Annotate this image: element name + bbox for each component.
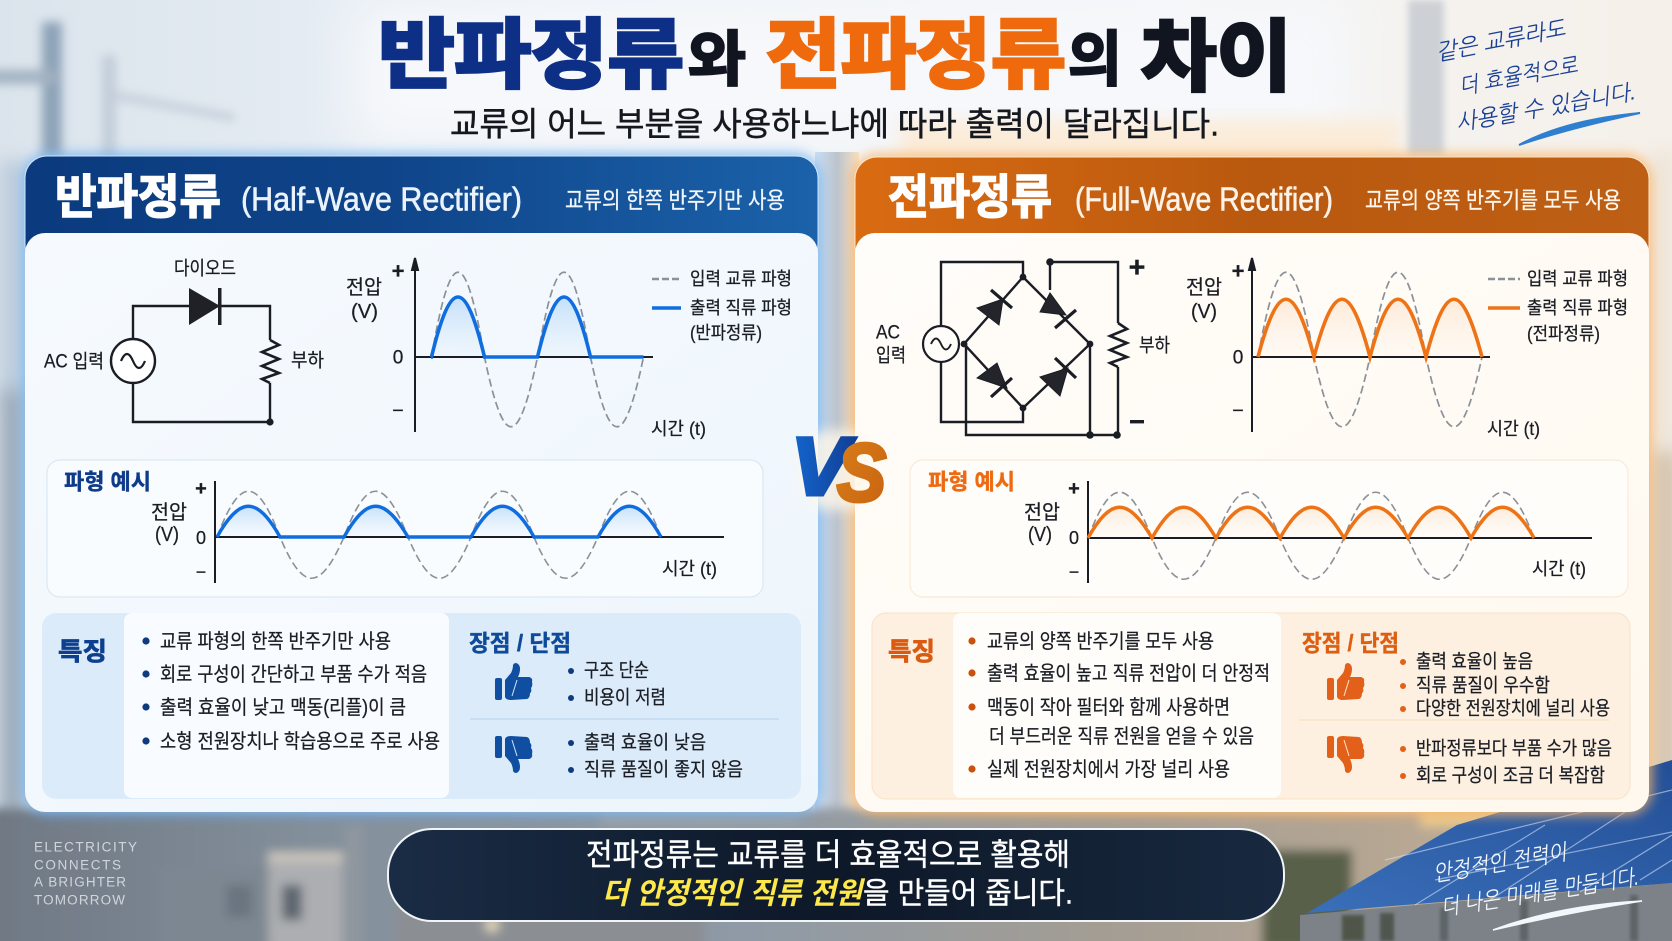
handwritten note: top right: 같은 교류라도 (1434, 15, 1568, 65)
features list: 교류 파형의 한쪽 반주기만 사용 (160, 630, 391, 653)
features list (968, 630, 1270, 781)
cons list (568, 732, 743, 780)
chart: full-wave voltage graph: − (1232, 400, 1244, 422)
handwritten note: top right (1434, 15, 1640, 145)
icon: resistor (1110, 323, 1127, 367)
icon: thumbs down (1327, 736, 1364, 773)
pros and cons block (469, 630, 779, 780)
label: load: 부하 (291, 350, 324, 372)
label: AC input: AC 입력 (44, 350, 104, 372)
tagline: electricity connects: CONNECTS (34, 858, 121, 872)
callout line 2 (602, 878, 1073, 910)
chart: full-wave voltage graph: + (1232, 258, 1244, 284)
callout: conclusion pill (388, 829, 1284, 921)
waveform example box: 0 (1069, 528, 1079, 548)
label: AC input: AC (876, 322, 900, 344)
label: AC input: 입력 (876, 344, 906, 366)
pros and cons block (1299, 630, 1612, 786)
waveform example box: − (196, 562, 206, 582)
header band (25, 156, 818, 266)
icon: AC source (111, 339, 155, 383)
chart legend: (반파정류) (690, 323, 762, 343)
panel body (25, 233, 818, 812)
circuit: half-wave diode circuit (44, 258, 324, 426)
header description: 교류의 양쪽 반주기를 모두 사용 (1365, 187, 1621, 213)
panel body (855, 233, 1649, 812)
icon: resistor (262, 340, 279, 383)
chart: half-wave voltage graph: 시간 (t) (651, 419, 706, 439)
panel: full-wave rectifier (852, 154, 1652, 815)
pros list: 출력 효율이 높음 (1416, 650, 1533, 672)
lower landscape (0, 805, 1672, 941)
waveform example box (47, 460, 763, 597)
waveform example box: 시간 (t) (1532, 559, 1586, 579)
cons list: 회로 구성이 조금 더 복잡함 (1416, 764, 1605, 786)
pros list: 구조 단순 (584, 660, 649, 682)
pros list: 직류 품질이 우수함 (1416, 674, 1550, 696)
features list: 소형 전원장치나 학습용으로 주로 사용 (160, 730, 440, 753)
chart legend (652, 269, 792, 343)
callout line 1: 전파정류는 교류를 더 효율적으로 활용해 (586, 838, 1070, 872)
waveform title: 파형 예시 (928, 470, 1015, 494)
features heading: 특징 (888, 638, 935, 666)
title: 차이 (1141, 13, 1292, 101)
chart: half-wave voltage graph (346, 258, 792, 439)
chart: full-wave voltage graph: (V) (1191, 301, 1217, 323)
circuit: full-wave bridge rectifier (876, 252, 1170, 439)
chart legend: 출력 직류 파형 (690, 298, 792, 318)
features list: 더 부드러운 직류 전원을 얻을 수 있음 (989, 725, 1254, 748)
label: AC input (876, 322, 906, 366)
callout line 2: 더 안정적인 직류 전원 (602, 878, 865, 910)
waveform example box: 전압 (151, 501, 187, 524)
waveform example box: (V) (155, 524, 179, 546)
callout line 2: 을 만들어 줍니다. (863, 878, 1073, 910)
chart legend: 출력 직류 파형 (1527, 298, 1628, 318)
tagline: electricity connects: TOMORROW (34, 892, 125, 908)
panel glow (22, 153, 821, 815)
handwritten note: bottom right: 더 나은 미래를 만듭니다. (1439, 864, 1640, 920)
chart: half-wave voltage graph: 전압 (346, 276, 382, 299)
header english name: (Half-Wave Rectifier) (241, 180, 522, 218)
pros list: 비용이 저렴 (584, 686, 666, 708)
header description: 교류의 한쪽 반주기만 사용 (565, 187, 785, 213)
chart legend: 입력 교류 파형 (1527, 269, 1628, 289)
chart legend: (전파정류) (1527, 324, 1600, 344)
features list: 실제 전원장치에서 가장 널리 사용 (987, 758, 1230, 781)
label: diode: 다이오드 (174, 258, 236, 280)
chart legend (1488, 269, 1628, 344)
label: minus terminal (1130, 420, 1144, 423)
title: 의 (1068, 26, 1122, 94)
chart: half-wave voltage graph: − (392, 400, 404, 422)
waveform example box: 0 (196, 528, 206, 548)
title: 와 (688, 26, 746, 94)
panel glow (852, 154, 1652, 815)
pros list (568, 660, 666, 708)
cons list (1400, 738, 1612, 786)
features list: 맥동이 작아 필터와 함께 사용하면 (987, 696, 1230, 719)
handwritten note: top right: 사용할 수 있습니다. (1454, 79, 1637, 135)
chart: full-wave voltage graph (1186, 258, 1628, 439)
pros cons heading: 장점 / 단점 (1302, 630, 1399, 656)
waveform example box: − (1069, 562, 1079, 582)
waveform example box (910, 460, 1628, 597)
chart: half-wave voltage graph: (V) (351, 301, 378, 323)
features block (42, 613, 801, 799)
subtitle: 교류의 어느 부분을 사용하느냐에 따라 출력이 달라집니다. (450, 106, 1219, 142)
panel: half-wave rectifier (22, 153, 821, 815)
label: plus terminal: + (1129, 252, 1145, 284)
gap between panels (815, 152, 859, 816)
header title: 반파정류 (55, 170, 221, 224)
chart: full-wave voltage graph: 전압 (1186, 276, 1222, 299)
waveform example box: 전압 (1024, 501, 1060, 524)
icon: thumbs up (1327, 663, 1364, 700)
pros cons heading: 장점 / 단점 (469, 630, 571, 656)
title: 반파정류 (378, 14, 684, 98)
icon: thumbs down (495, 736, 532, 773)
VS badge (791, 422, 886, 518)
chart: full-wave voltage graph: 0 (1233, 348, 1243, 368)
handwritten note: bottom right: 안정적인 전력이 (1431, 839, 1570, 886)
icon: AC source (923, 326, 959, 362)
header title: 전파정류 (888, 170, 1052, 224)
cons list: 반파정류보다 부품 수가 많음 (1416, 738, 1612, 760)
waveform title: 파형 예시 (64, 470, 151, 494)
title: 전파정류 (766, 14, 1066, 98)
title (378, 13, 1292, 101)
tagline: electricity connects: A BRIGHTER (34, 874, 126, 890)
waveform example box: (V) (1028, 524, 1052, 546)
header band (855, 157, 1649, 267)
chart: full-wave voltage graph: 시간 (t) (1487, 419, 1540, 439)
tagline: electricity connects (34, 840, 137, 908)
waveform example box: + (195, 478, 207, 500)
pros list (1400, 650, 1610, 720)
features list: 출력 효율이 높고 직류 전압이 더 안정적 (987, 662, 1270, 685)
chart: half-wave voltage graph: + (392, 258, 404, 284)
features list: 출력 효율이 낮고 맥동(리플)이 큼 (160, 696, 406, 719)
cons list: 직류 품질이 좋지 않음 (584, 758, 743, 780)
icon: diode (189, 288, 222, 325)
waveform example box: + (1068, 478, 1080, 500)
icon: bridge diodes (977, 290, 1076, 397)
chart legend: 입력 교류 파형 (690, 269, 792, 289)
tagline: electricity connects: ELECTRICITY (34, 840, 137, 854)
features list (142, 630, 440, 753)
handwritten note: bottom right (1431, 839, 1642, 930)
features heading: 특징 (58, 638, 107, 666)
cons list: 출력 효율이 낮음 (584, 732, 706, 754)
handwritten note: top right: 더 효율적으로 (1457, 53, 1580, 99)
label: load: 부하 (1139, 334, 1170, 356)
header english name: (Full-Wave Rectifier) (1075, 180, 1333, 218)
icon: thumbs up (495, 663, 532, 700)
VS badge: V (791, 422, 856, 512)
pros list: 다양한 전원장치에 널리 사용 (1416, 698, 1610, 720)
waveform example box: 시간 (t) (662, 559, 717, 579)
chart: half-wave voltage graph: 0 (393, 348, 403, 368)
features block (872, 613, 1630, 799)
features list: 교류의 양쪽 반주기를 모두 사용 (987, 630, 1214, 653)
features list: 회로 구성이 간단하고 부품 수가 적음 (160, 663, 427, 686)
VS badge: S (837, 428, 886, 518)
